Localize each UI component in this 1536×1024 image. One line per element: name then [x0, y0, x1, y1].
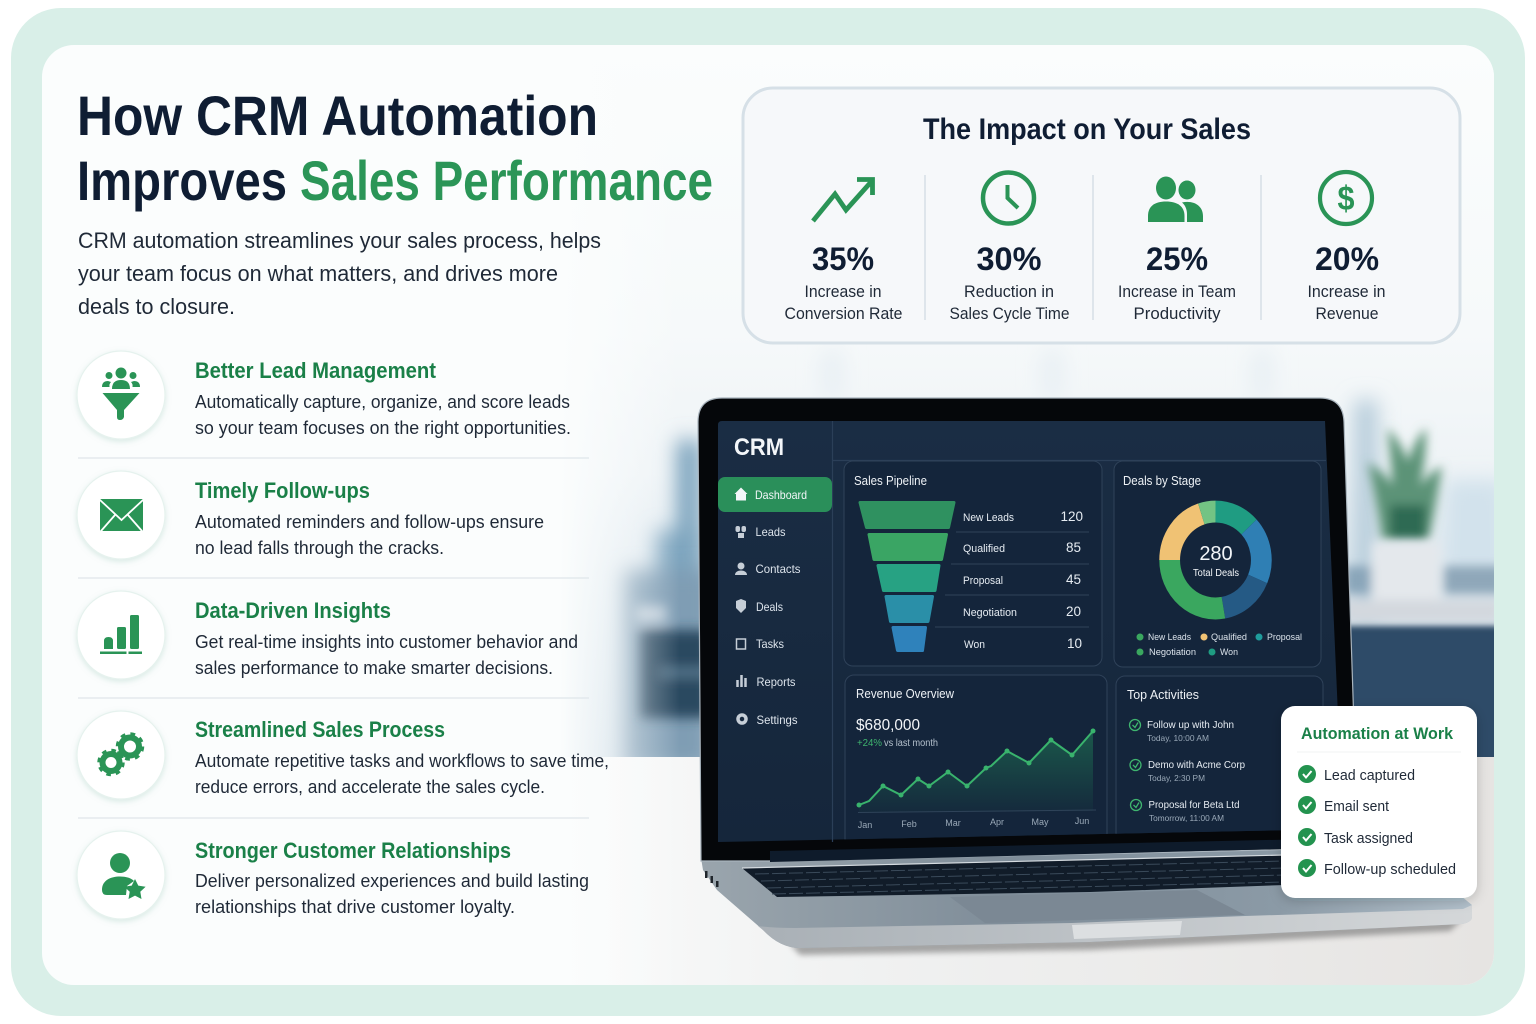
donut legend: Qualified: [1211, 632, 1247, 643]
benefit: data-driven insights: Data-Driven Insights: [195, 598, 391, 623]
panel: revenue overview: Revenue Overview: [856, 687, 955, 701]
chart months: Mar: [945, 818, 961, 828]
benefit: streamlined sales process: reduce errors, and accelerate the sales cycle.: [195, 777, 545, 797]
crm dashboard screen: [718, 421, 1343, 850]
chart months: [858, 818, 1089, 828]
panel: revenue overview: $680,000: [856, 717, 920, 734]
funnel labels: Qualified: [963, 543, 1005, 555]
benefit: streamlined sales process: Streamlined Sales Process: [195, 717, 445, 742]
stat: team productivity: Productivity: [1134, 305, 1221, 323]
stat: sales cycle time: Sales Cycle Time: [950, 305, 1070, 323]
stat: sales cycle time: 30%: [976, 241, 1042, 277]
funnel values: 120: [1060, 509, 1083, 524]
sidebar navigation: Tasks: [756, 637, 784, 651]
intro paragraph: CRM automation streamlines your sales process, helps: [78, 228, 601, 253]
donut legend: [1136, 632, 1302, 658]
side ports: [705, 871, 718, 887]
blurred left window: [622, 570, 712, 770]
funnel labels: Won: [964, 639, 985, 651]
funnel values: 20: [1066, 604, 1081, 619]
donut chart: [1170, 512, 1261, 608]
funnel values: 45: [1066, 572, 1081, 587]
benefit: better lead management: Better Lead Management: [195, 358, 437, 383]
icon: bar chart: [77, 591, 165, 679]
background plant: [1368, 428, 1442, 540]
chart months: Jan: [858, 820, 872, 830]
panel: top activities: Tomorrow, 11:00 AM: [1149, 813, 1224, 823]
stat: conversion rate: [784, 180, 902, 323]
laptop lid: [698, 398, 1358, 861]
benefit: data-driven insights: sales performance to make smarter decisions.: [195, 658, 553, 678]
checklist: Task assigned: [1324, 830, 1413, 847]
chart months: Jun: [1075, 816, 1089, 826]
laptop base: [701, 846, 1472, 948]
sidebar navigation: Deals: [756, 600, 783, 614]
callout: automation at work: Automation at Work: [1301, 724, 1454, 743]
checklist: Email sent: [1324, 798, 1390, 815]
panel: top activities: Today, 10:00 AM: [1147, 733, 1209, 743]
panel: sales pipeline: [844, 461, 1102, 666]
benefit: better lead management: [77, 351, 571, 439]
laptop shadow: [790, 920, 1462, 955]
stat: revenue: $: [1338, 180, 1355, 218]
panel: top activities: [1116, 676, 1323, 848]
panel: revenue overview: [845, 675, 1107, 850]
icon: lead funnel: [77, 351, 165, 439]
callout: automation at work: [1281, 706, 1477, 898]
panel: revenue overview: +24%: [857, 738, 882, 749]
active nav: dashboard: [718, 477, 832, 512]
stat: conversion rate: Increase in: [804, 283, 882, 301]
panel: top activities: Follow up with John: [1147, 719, 1234, 731]
title: [77, 84, 713, 212]
funnel labels: Negotiation: [963, 607, 1017, 619]
panel: deals by stage: [1114, 461, 1321, 667]
donut legend: New Leads: [1148, 632, 1191, 643]
keyboard: [742, 855, 1285, 897]
donut legend: Negotiation: [1149, 647, 1196, 658]
stat: revenue: Increase in: [1308, 283, 1386, 301]
stat: team productivity: Increase in Team: [1118, 283, 1236, 301]
benefit: data-driven insights: [77, 591, 578, 679]
stat: sales cycle time: Reduction in: [964, 283, 1054, 301]
benefit: timely follow-ups: Automated reminders and follow-ups ensure: [195, 512, 544, 532]
sidebar navigation: Contacts: [756, 562, 800, 576]
stat: revenue: 20%: [1315, 241, 1379, 277]
benefit: timely follow-ups: Timely Follow-ups: [195, 478, 370, 503]
funnel labels: New Leads: [963, 512, 1014, 524]
sidebar navigation: [735, 525, 800, 727]
title: Sales Performance: [300, 149, 713, 212]
panel: top activities: Demo with Acme Corp: [1148, 759, 1245, 771]
checklist: Lead captured: [1324, 767, 1415, 784]
icon: envelope: [77, 471, 165, 559]
stat: sales cycle time: [950, 172, 1070, 323]
table surface: [540, 757, 1494, 987]
stat: revenue: Revenue: [1316, 305, 1378, 323]
funnel values: [1060, 509, 1083, 651]
panel: top activities: Today, 2:30 PM: [1148, 773, 1205, 783]
funnel: [860, 502, 954, 650]
funnel values: 85: [1066, 540, 1081, 555]
panel: deals by stage: Deals by Stage: [1123, 474, 1201, 488]
sidebar navigation: Leads: [756, 525, 786, 539]
chart months: Apr: [990, 817, 1004, 827]
panel: top activities: Top Activities: [1127, 688, 1199, 702]
impact heading: The Impact on Your Sales: [923, 113, 1251, 146]
checklist: Follow-up scheduled: [1324, 861, 1456, 878]
icon: person with star: [77, 831, 165, 919]
donut legend: Won: [1220, 647, 1238, 658]
intro paragraph: [78, 228, 601, 319]
benefit: timely follow-ups: no lead falls through the cracks.: [195, 538, 444, 558]
panel: the impact on your sales: [743, 88, 1460, 343]
active nav: dashboard: Dashboard: [755, 488, 807, 502]
benefit: stronger customer relationships: Deliver personalized experiences and build lasting: [195, 871, 589, 891]
stat: conversion rate: 35%: [812, 241, 874, 277]
benefit: better lead management: so your team focuses on the right opportunities.: [195, 418, 571, 438]
funnel labels: Proposal: [963, 575, 1003, 587]
panel: revenue overview: vs last month: [884, 738, 938, 749]
funnel labels: [963, 512, 1017, 651]
chart months: Feb: [901, 819, 917, 829]
laptop: [698, 398, 1472, 948]
icon: gears: [77, 711, 165, 799]
benefit: stronger customer relationships: Stronger Customer Relationships: [195, 838, 511, 863]
donut legend: Proposal: [1267, 632, 1302, 643]
panel: sales pipeline: Sales Pipeline: [854, 474, 927, 488]
intro paragraph: your team focus on what matters, and drives more: [78, 261, 558, 286]
funnel values: 10: [1067, 636, 1082, 651]
title: How CRM Automation: [77, 84, 598, 147]
intro paragraph: deals to closure.: [78, 294, 235, 319]
benefit: streamlined sales process: [77, 711, 609, 799]
stat: team productivity: [1118, 176, 1236, 323]
sidebar navigation: Reports: [756, 675, 796, 689]
stat: conversion rate: Conversion Rate: [784, 305, 902, 323]
title: Improves: [77, 149, 287, 212]
benefit: timely follow-ups: [77, 471, 544, 559]
stat: revenue: [1308, 172, 1386, 323]
donut total: 280: [1199, 543, 1233, 565]
donut total: [1193, 543, 1239, 579]
benefit: streamlined sales process: Automate repetitive tasks and workflows to save time,: [195, 751, 609, 771]
checklist: [1298, 765, 1456, 878]
stat: team productivity: 25%: [1146, 241, 1208, 277]
benefit: data-driven insights: Get real-time insights into customer behavior and: [195, 632, 578, 652]
chart months: May: [1031, 817, 1049, 827]
benefit: stronger customer relationships: [77, 831, 589, 919]
benefit: stronger customer relationships: relationships that drive customer loyalty.: [195, 897, 515, 917]
benefit: better lead management: Automatically capture, organize, and score leads: [195, 392, 570, 412]
donut total: Total Deals: [1193, 568, 1239, 579]
panel: top activities: Proposal for Beta Ltd: [1148, 799, 1240, 811]
revenue line chart: [856, 728, 1096, 813]
crm logo: CRM: [734, 434, 784, 461]
sidebar navigation: Settings: [756, 713, 798, 727]
